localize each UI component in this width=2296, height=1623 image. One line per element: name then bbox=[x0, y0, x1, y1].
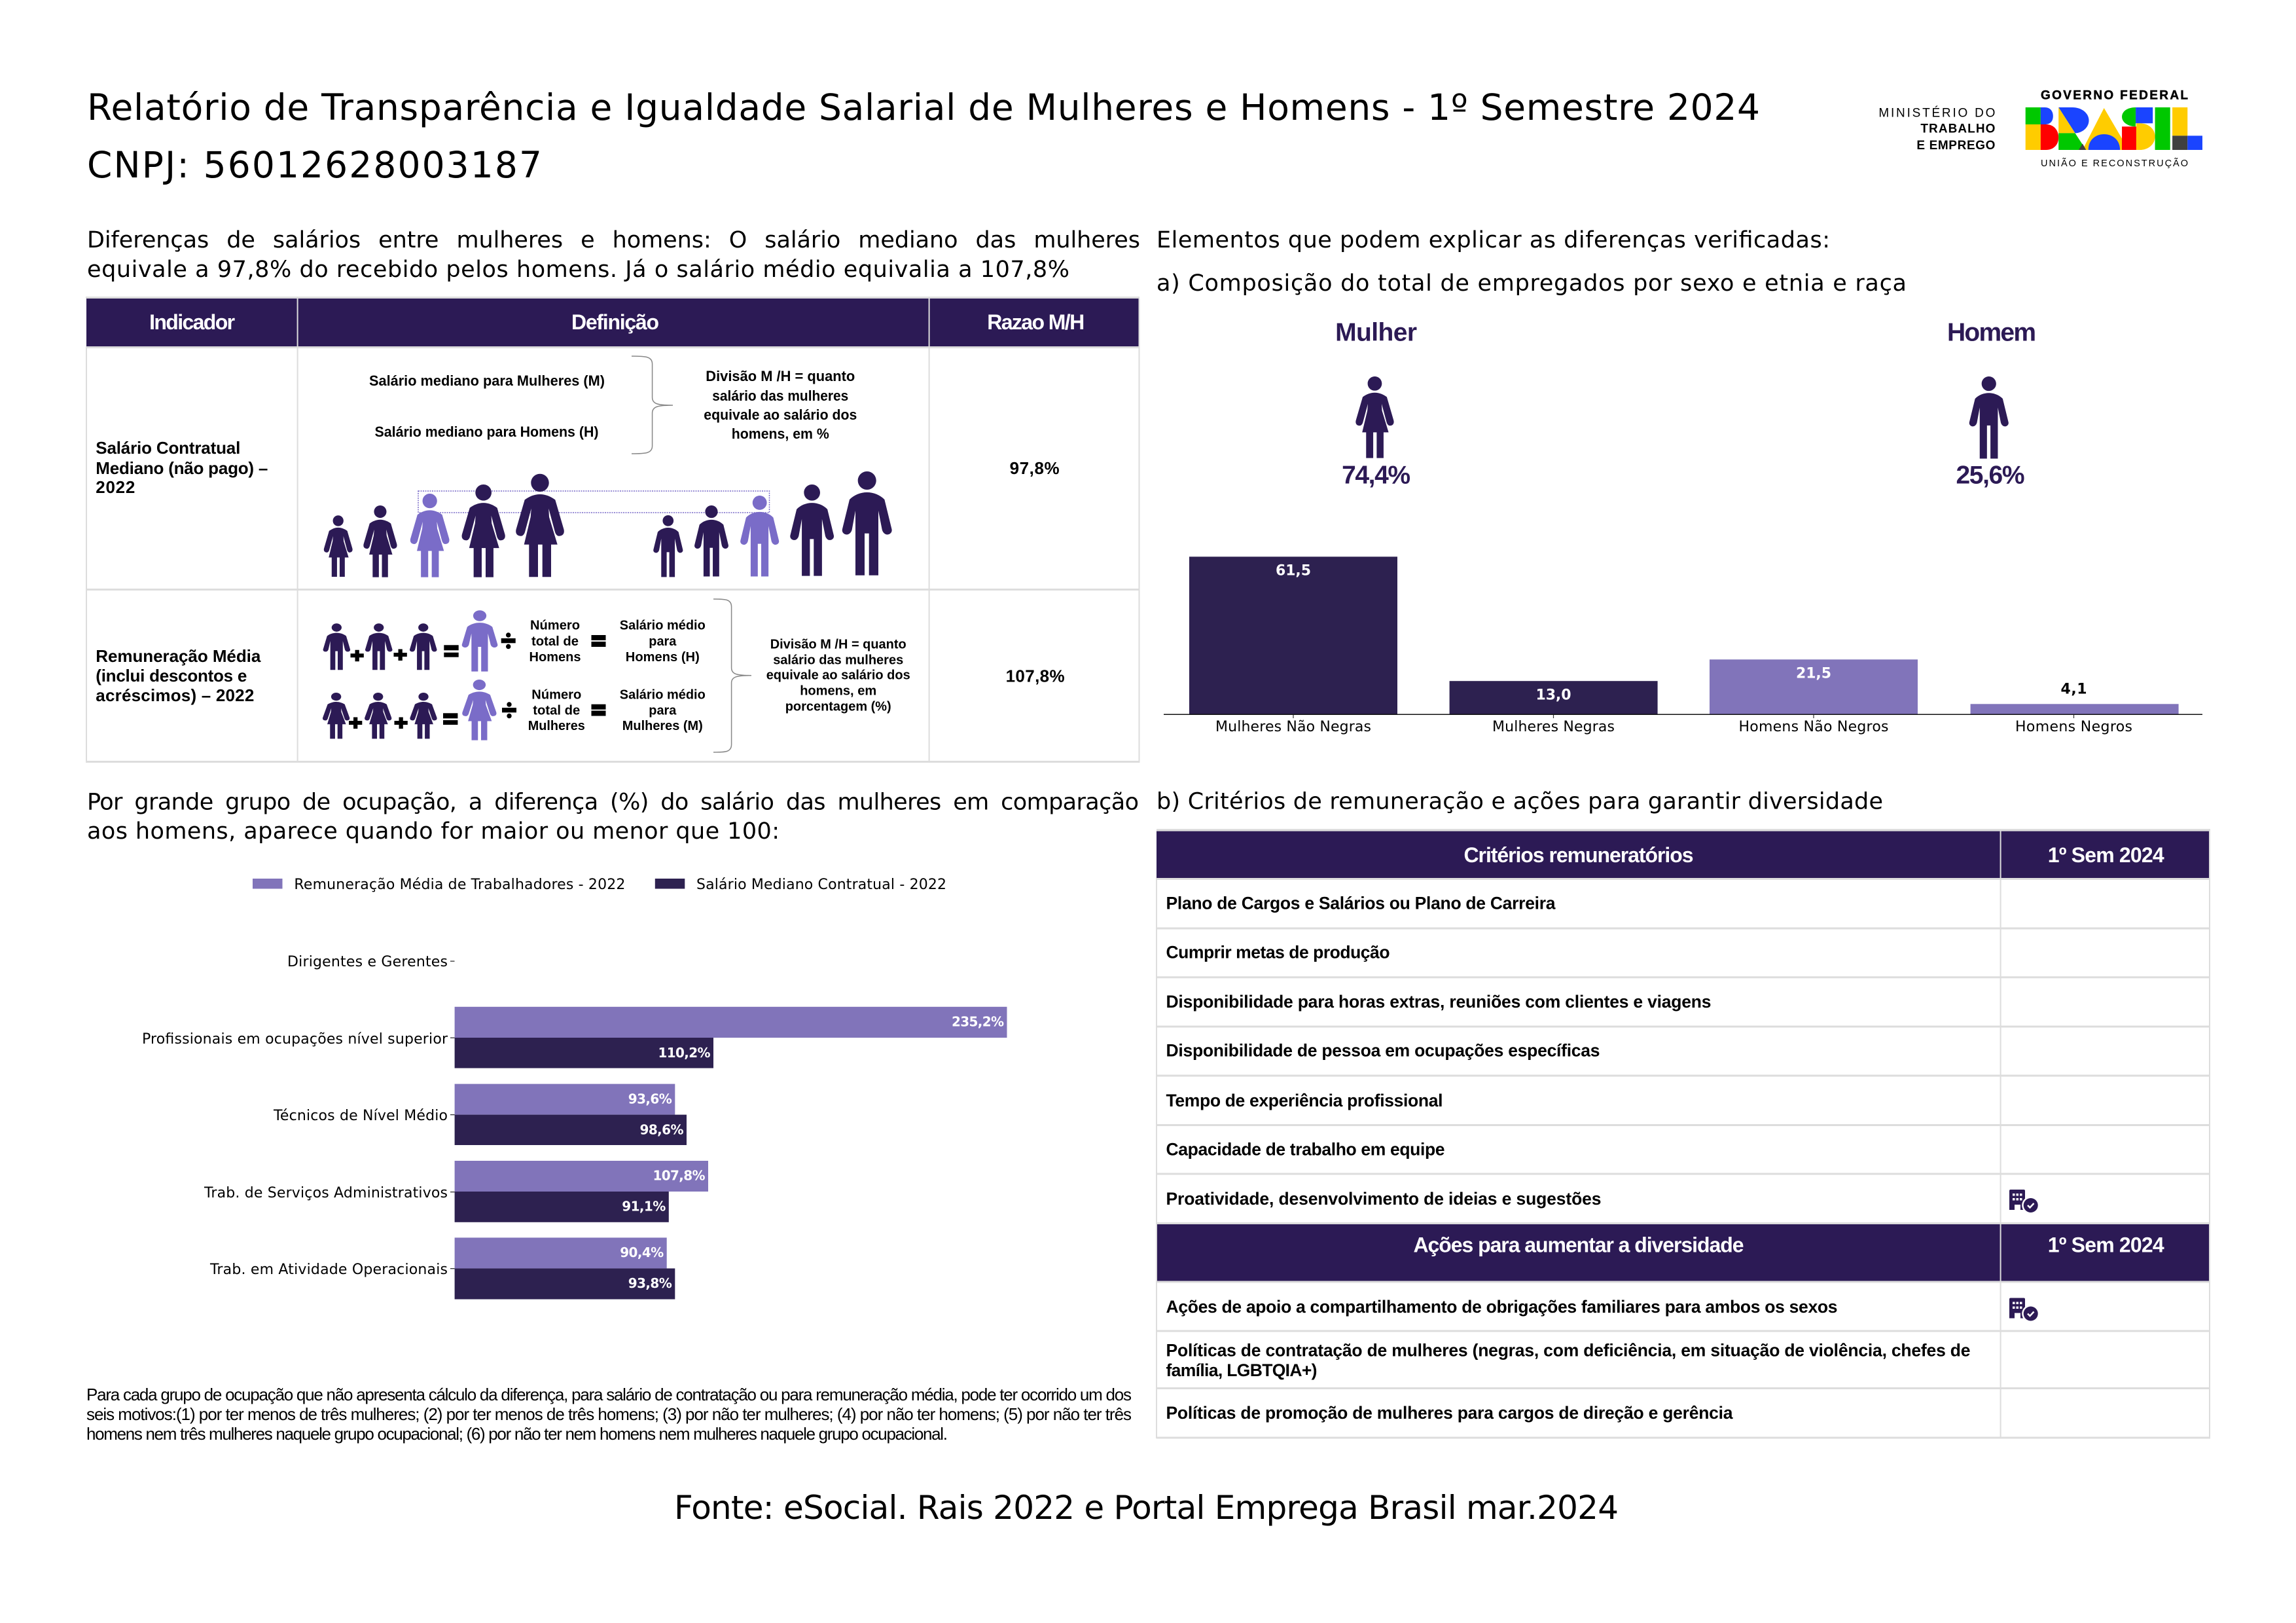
criteria list: Tempo de experiência profissional bbox=[1166, 1091, 1443, 1110]
icon: empresa com ação bbox=[2009, 1298, 2039, 1322]
formula: salário médio para mulheres: Salário médio bbox=[620, 688, 706, 702]
header: ações para aumentar a diversidade: Ações para aumentar a diversidade bbox=[1414, 1233, 1744, 1256]
formula: salário médio para mulheres: Mulheres bbox=[528, 719, 585, 733]
formula: salário médio para homens: total de bbox=[531, 634, 579, 649]
criteria list bbox=[1166, 894, 1711, 1209]
stat: mulher 74,4%: 74,4% bbox=[1342, 461, 1410, 489]
text: por grande grupo de ocupação bbox=[87, 790, 1139, 845]
title: CNPJ: 56012628003187 bbox=[87, 144, 542, 186]
text: por grande grupo de ocupação: aos homens, aparece quando for maior ou menor que 100: bbox=[87, 818, 780, 845]
heading: elementos que podem explicar: a) Composição do total de empregados por sexo e etnia e raça bbox=[1157, 270, 1907, 297]
category: atividade operacionais bbox=[209, 1237, 675, 1299]
category: atividade operacionais: 90,4% bbox=[620, 1245, 664, 1260]
footnote bbox=[86, 1385, 1132, 1444]
stat: homem 25,6%: Homem bbox=[1947, 319, 2036, 347]
logo: governo federal brasil: GOVERNO FEDERAL bbox=[2041, 89, 2188, 103]
category: profissionais nível superior: 235,2% bbox=[952, 1014, 1004, 1030]
definition text: divisão m/h: salário das mulheres bbox=[712, 388, 848, 404]
category: serviços administrativos: 107,8% bbox=[653, 1168, 706, 1184]
logo: governo federal brasil bbox=[2026, 89, 2202, 169]
text: diferenças de salários bbox=[87, 227, 1140, 283]
criteria list: Cumprir metas de produção bbox=[1166, 943, 1390, 962]
legend bbox=[253, 877, 946, 893]
stat: homem 25,6%: 25,6% bbox=[1956, 461, 2025, 489]
row label: salário contratual mediano: Salário Contratual bbox=[96, 438, 240, 458]
row label: remuneração média: Remuneração Média bbox=[96, 646, 261, 666]
row label: remuneração média: acréscimos) – 2022 bbox=[96, 685, 254, 705]
definition text: divisão m/h: Divisão M /H = quanto bbox=[706, 368, 855, 384]
formula: salário médio para homens: Número bbox=[530, 619, 580, 633]
category: profissionais nível superior: Profissionais em ocupações nível superior bbox=[142, 1031, 448, 1048]
row label: salário contratual mediano: 2022 bbox=[96, 477, 135, 497]
formula: salário médio para homens bbox=[323, 610, 706, 672]
heading: critérios de remuneração: b) Critérios de remuneração e ações para garantir diversidade bbox=[1157, 788, 1883, 814]
stat: homem 25,6% bbox=[1947, 319, 2036, 489]
formula: salário médio para homens: para bbox=[649, 634, 677, 649]
panel: tabela indicador definição razão bbox=[86, 297, 1140, 763]
category: serviços administrativos: 91,1% bbox=[622, 1198, 666, 1214]
criteria list: Disponibilidade para horas extras, reuniões com clientes e viagens bbox=[1166, 992, 1711, 1012]
logo: governo federal brasil: UNIÃO E RECONSTRUÇÃO bbox=[2041, 158, 2188, 169]
bar chart: composição por sexo e raça: Mulheres Negras bbox=[1492, 719, 1615, 735]
text: diferenças de salários: equivale a 97,8% do recebido pelos homens. Já o salário médio equivalia a 107,8% bbox=[87, 257, 1069, 283]
logo: ministério do trabalho e emprego: TRABALHO bbox=[1920, 122, 1995, 136]
table header: Razao M/H bbox=[987, 310, 1085, 334]
definition text: divisão em porcentagem: porcentagem (%) bbox=[785, 700, 891, 714]
logo: ministério do trabalho e emprego bbox=[1878, 107, 1995, 153]
stat: mulher 74,4% bbox=[1335, 319, 1417, 489]
formula: salário médio para mulheres: Mulheres (M) bbox=[622, 719, 703, 733]
header: critérios remuneratórios: 1º Sem 2024 bbox=[2048, 843, 2164, 867]
criteria list: Plano de Cargos e Salários ou Plano de Carreira bbox=[1166, 894, 1556, 913]
formula: salário médio para mulheres: total de bbox=[533, 704, 580, 718]
bar chart: composição por sexo e raça: 61,5 bbox=[1276, 563, 1311, 579]
logo: ministério do trabalho e emprego: E EMPREGO bbox=[1916, 139, 1995, 153]
table header bbox=[149, 310, 1085, 334]
formula: salário médio para homens: Homens (H) bbox=[626, 650, 700, 665]
definition text: divisão em porcentagem: homens, em bbox=[800, 684, 876, 699]
row label: salário contratual mediano bbox=[96, 438, 268, 497]
category: técnicos de nível médio: 93,6% bbox=[628, 1091, 672, 1106]
icons: mulheres e homens ordenados por salário bbox=[324, 471, 892, 577]
title bbox=[87, 86, 1760, 186]
bar chart: composição por sexo e raça: 21,5 bbox=[1796, 665, 1831, 682]
category: atividade operacionais: 93,8% bbox=[628, 1275, 672, 1291]
heading: elementos que podem explicar: Elementos que podem explicar as diferenças verificadas: bbox=[1157, 227, 1830, 253]
definition text: divisão m/h bbox=[704, 368, 857, 442]
actions list: Políticas de promoção de mulheres para cargos de direção e gerência bbox=[1166, 1403, 1733, 1423]
category: serviços administrativos bbox=[204, 1161, 708, 1222]
bar chart: composição por sexo e raça: Homens Não Negros bbox=[1738, 719, 1889, 735]
panel: tabela critérios e ações bbox=[1157, 829, 2210, 1438]
definition text: salário mediano: Salário mediano para Homens (H) bbox=[374, 424, 598, 440]
actions list: Políticas de contratação de mulheres (negras, com deficiência, em situação de violência, chefes de bbox=[1166, 1341, 1970, 1360]
footnote: seis motivos:(1) por ter menos de três mulheres; (2) por ter menos de três homens; (3) por não ter mulheres; (4) por não ter homens; (5) por não ter três bbox=[86, 1404, 1132, 1424]
row label: remuneração média bbox=[96, 646, 261, 705]
bar chart: composição por sexo e raça: Homens Negros bbox=[2015, 719, 2132, 735]
legend: Remuneração Média de Trabalhadores - 2022 bbox=[294, 877, 625, 893]
actions list: família, LGBTQIA+) bbox=[1166, 1360, 1317, 1380]
criteria list: Proatividade, desenvolvimento de ideias e sugestões bbox=[1166, 1189, 1601, 1209]
text: diferenças de salários: Diferenças de salários entre mulheres e homens: O salário mediano das mulheres bbox=[87, 227, 1140, 253]
header: ações para aumentar a diversidade: 1º Sem 2024 bbox=[2048, 1233, 2164, 1256]
category: atividade operacionais: Trab. em Atividade Operacionais bbox=[209, 1262, 448, 1278]
source: Fonte: eSocial. Rais 2022 e Portal Emprega Brasil mar.2024 bbox=[674, 1489, 1619, 1527]
definition text: divisão em porcentagem: equivale ao salário dos bbox=[766, 668, 910, 683]
footnote: homens nem três mulheres naquele grupo ocupacional; (6) por não ter nem homens nem mulheres naquele grupo ocupacional. bbox=[86, 1424, 948, 1444]
formula: salário médio para homens: Salário médio bbox=[620, 619, 706, 633]
logo: ministério do trabalho e emprego: MINISTÉRIO DO bbox=[1878, 107, 1995, 120]
definition text: divisão m/h: homens, em % bbox=[732, 426, 829, 442]
definition text: divisão em porcentagem: salário das mulheres bbox=[773, 653, 903, 667]
text: por grande grupo de ocupação: Por grande grupo de ocupação, a diferença (%) do salário das mulheres em comparação bbox=[87, 790, 1139, 816]
bar chart: composição por sexo e raça bbox=[1164, 556, 2202, 735]
bar chart: diferença por grupo de ocupação bbox=[142, 954, 1007, 1299]
definition text: divisão m/h: equivale ao salário dos bbox=[704, 407, 857, 423]
actions list bbox=[1166, 1297, 1970, 1423]
category: técnicos de nível médio: Técnicos de Nível Médio bbox=[273, 1108, 448, 1124]
brace bbox=[632, 356, 673, 454]
table header: Indicador bbox=[149, 310, 235, 334]
formula: salário médio para mulheres: para bbox=[649, 704, 677, 718]
stat: mulher 74,4%: Mulher bbox=[1335, 319, 1417, 347]
heading: elementos que podem explicar bbox=[1157, 227, 1907, 297]
definition text: divisão em porcentagem: Divisão M /H = quanto bbox=[770, 638, 906, 652]
criteria list: Disponibilidade de pessoa em ocupações específicas bbox=[1166, 1041, 1600, 1061]
header: ações para aumentar a diversidade bbox=[1414, 1233, 2164, 1256]
category: dirigentes e gerentes: Dirigentes e Gerentes bbox=[287, 954, 448, 970]
category: técnicos de nível médio bbox=[273, 1084, 687, 1145]
category: profissionais nível superior bbox=[142, 1007, 1007, 1068]
bar chart: composição por sexo e raça: 4,1 bbox=[2060, 681, 2087, 697]
table header: Definição bbox=[571, 310, 659, 334]
legend: Salário Mediano Contratual - 2022 bbox=[696, 877, 946, 893]
bar chart: composição por sexo e raça: Mulheres Não Negras bbox=[1215, 719, 1371, 735]
definition text: salário mediano bbox=[369, 373, 605, 440]
formula: salário médio para mulheres bbox=[323, 680, 706, 740]
formula: salário médio para mulheres: Número bbox=[531, 688, 581, 702]
definition text: divisão em porcentagem bbox=[766, 638, 910, 714]
category: serviços administrativos: Trab. de Serviços Administrativos bbox=[204, 1185, 448, 1201]
brace bbox=[713, 599, 751, 752]
value: 107,8%: 107,8% bbox=[1006, 666, 1065, 686]
definition text: salário mediano: Salário mediano para Mulheres (M) bbox=[369, 373, 605, 389]
title: Relatório de Transparência e Igualdade Salarial de Mulheres e Homens - 1º Semestre 2024 bbox=[87, 86, 1760, 128]
row label: remuneração média: (inclui descontos e bbox=[96, 666, 247, 685]
footnote: Para cada grupo de ocupação que não apresenta cálculo da diferença, para salário de contratação ou para remuneração média, pode ter ocorrido um dos bbox=[86, 1385, 1132, 1404]
category: técnicos de nível médio: 98,6% bbox=[640, 1122, 683, 1138]
formula: salário médio para homens: Homens bbox=[529, 650, 581, 665]
header: critérios remuneratórios bbox=[1463, 843, 2164, 867]
value: 97,8%: 97,8% bbox=[1010, 458, 1060, 478]
criteria list: Capacidade de trabalho em equipe bbox=[1166, 1140, 1445, 1159]
row label: salário contratual mediano: Mediano (não pago) – bbox=[96, 458, 268, 478]
header: critérios remuneratórios: Critérios remuneratórios bbox=[1463, 843, 1694, 867]
actions list: Ações de apoio a compartilhamento de obrigações familiares para ambos os sexos bbox=[1166, 1297, 1838, 1317]
category: profissionais nível superior: 110,2% bbox=[658, 1045, 711, 1061]
bar chart: composição por sexo e raça: 13,0 bbox=[1535, 687, 1571, 703]
icon: empresa com critério bbox=[2009, 1190, 2039, 1214]
